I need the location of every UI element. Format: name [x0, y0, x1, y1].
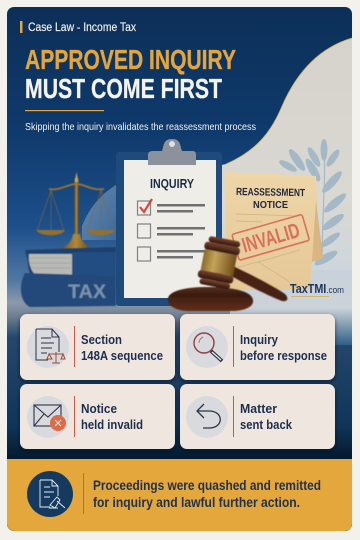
card: Inquiry before response: before response [240, 348, 327, 363]
notice heading: NOTICE [253, 199, 288, 211]
TAX label: TAX [68, 282, 106, 303]
conclusion banner [7, 459, 352, 531]
conclusion text: Proceedings were quashed and remitted [93, 477, 321, 493]
invalid stamp: INVALID [239, 219, 302, 257]
icon: document with gavel [27, 471, 73, 517]
card: Section 148A sequence: 148A sequence [81, 348, 163, 363]
card: Section 148A sequence [20, 314, 175, 380]
card: Notice held invalid [20, 384, 175, 449]
card: Matter sent back: sent back [240, 417, 293, 432]
card: Inquiry before response [180, 314, 335, 380]
reassessment notice [225, 172, 323, 290]
title: MUST COME FIRST [25, 73, 222, 104]
icon: stacked books [21, 247, 116, 307]
title: APPROVED INQUIRY [25, 44, 236, 75]
card: Section 148A sequence: Section [81, 332, 122, 347]
clipboard [116, 139, 222, 306]
icon: magnifier [194, 333, 222, 361]
icon: gavel [168, 235, 287, 311]
light wave backdrop [222, 38, 352, 275]
gavel handle [224, 263, 287, 301]
title [25, 44, 236, 104]
icon: return arrow [197, 404, 220, 428]
category label: Case Law - Income Tax [28, 22, 136, 34]
light arc behind scales [82, 185, 116, 240]
icon: scales of justice [36, 172, 115, 249]
conclusion text: for inquiry and lawful further action. [93, 494, 300, 510]
floor band [230, 270, 352, 345]
notice heading [236, 186, 306, 211]
notice heading: REASSESSMENT [236, 186, 306, 199]
card: Matter sent back [180, 384, 335, 449]
clipboard clip [148, 139, 196, 165]
brand: TaxTMI.com: TaxTMI.com [290, 282, 344, 296]
card: Matter sent back: Matter [240, 401, 277, 416]
card: Notice held invalid: Notice [81, 401, 117, 416]
card: Notice held invalid: held invalid [81, 417, 143, 432]
card: Inquiry before response: Inquiry [240, 332, 279, 347]
icon: leaves [278, 139, 348, 268]
checklist [138, 201, 150, 261]
icon: envelope with cross [34, 405, 66, 431]
subtitle: Skipping the inquiry invalidates the reassessment process [25, 121, 256, 133]
inquiry heading: INQUIRY [150, 176, 194, 191]
gavel head [196, 235, 242, 290]
sound block [168, 287, 253, 311]
conclusion text [93, 477, 321, 510]
icon: document with scales [36, 329, 65, 363]
